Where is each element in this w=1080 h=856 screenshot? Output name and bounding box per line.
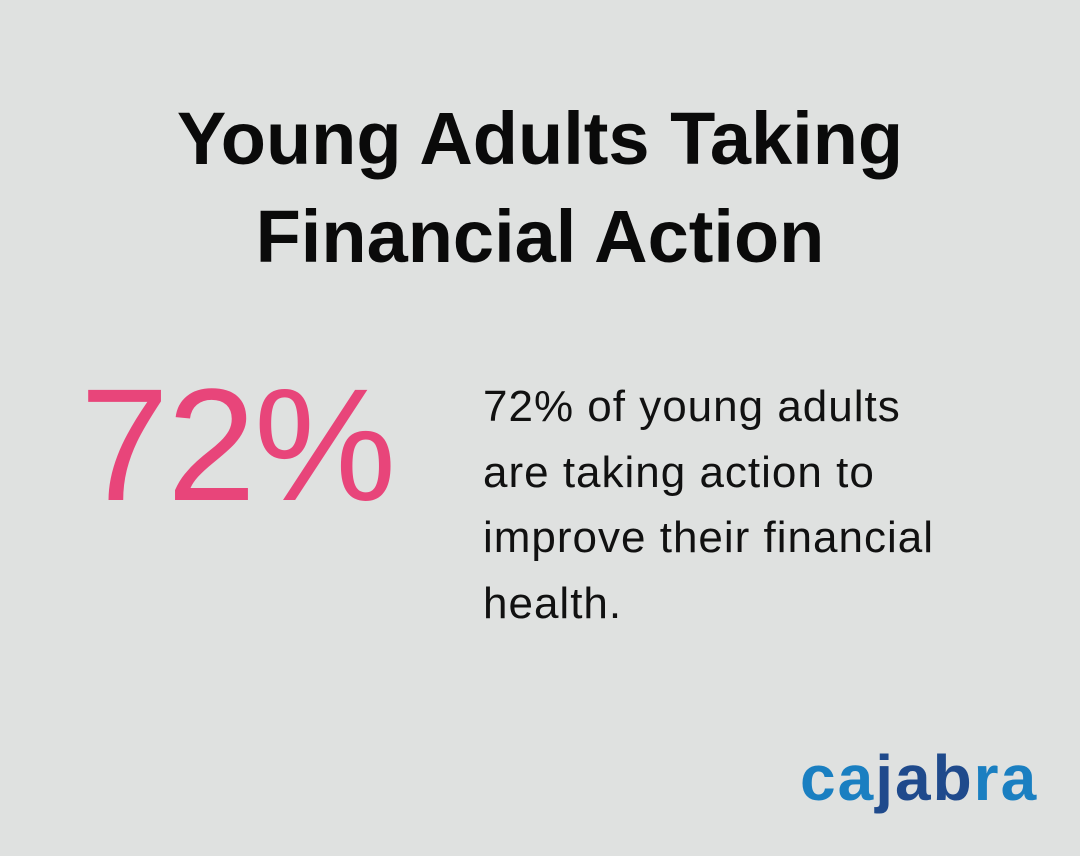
description text [483,382,934,628]
title: Financial Action [256,195,824,278]
description text: improve their financial [483,513,934,562]
title: Young Adults Taking [177,97,903,180]
description text: health. [483,578,622,628]
title [177,97,903,278]
description text: 72% of young adults [483,382,901,431]
description text: are taking action to [483,448,875,496]
big stat: 72%: 72% [80,355,394,534]
logo: cajabra: cajabra [800,742,1038,814]
